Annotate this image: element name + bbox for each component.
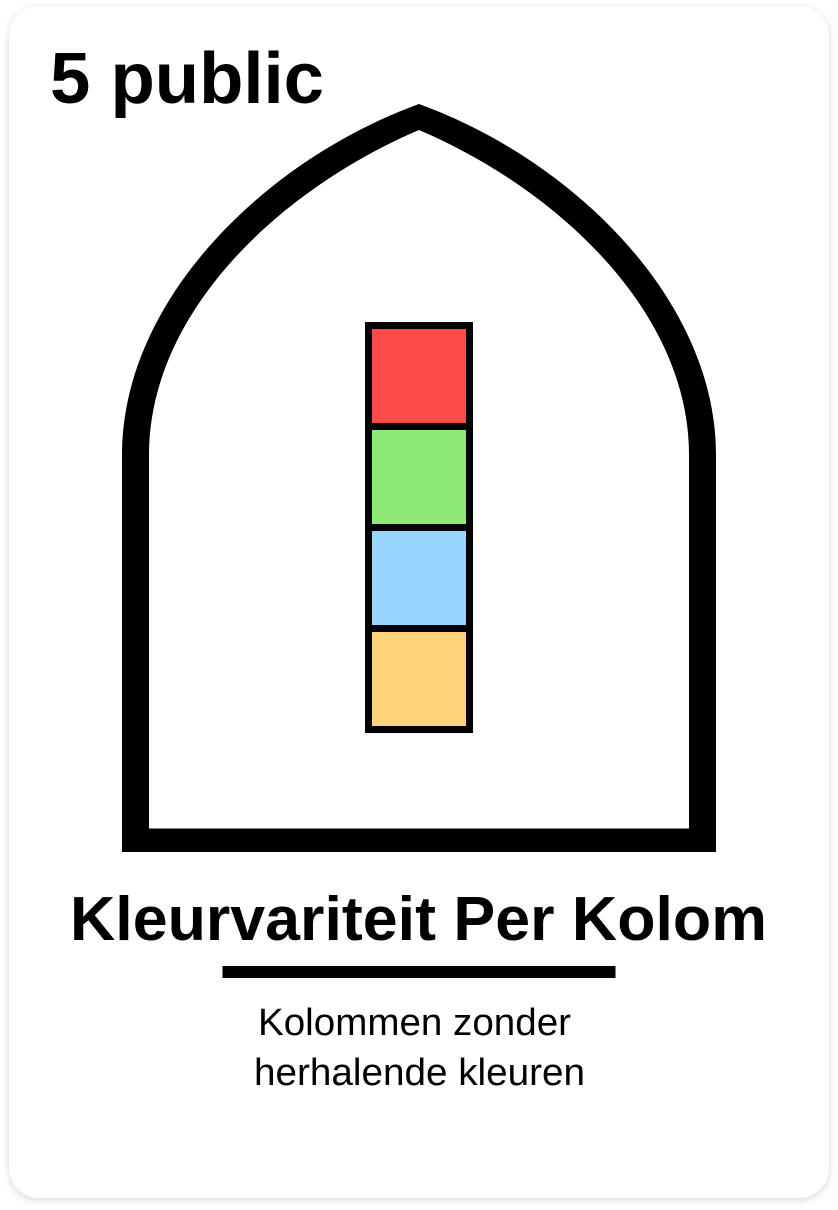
icon: gothic arch window outline [122,104,716,852]
green swatch [372,430,466,524]
subtitle [254,1002,585,1094]
label: 5 public: 5 public [50,39,324,119]
subtitle line 2: herhalende kleuren [254,1052,585,1094]
red swatch [372,329,466,423]
blue swatch [372,531,466,625]
title underline [222,966,616,978]
title: Kleurvariteit Per Kolom [70,885,767,954]
color column [365,322,473,733]
column frame [365,322,473,733]
subtitle line 1: Kolommen zonder [258,1002,571,1044]
orange swatch [372,632,466,726]
